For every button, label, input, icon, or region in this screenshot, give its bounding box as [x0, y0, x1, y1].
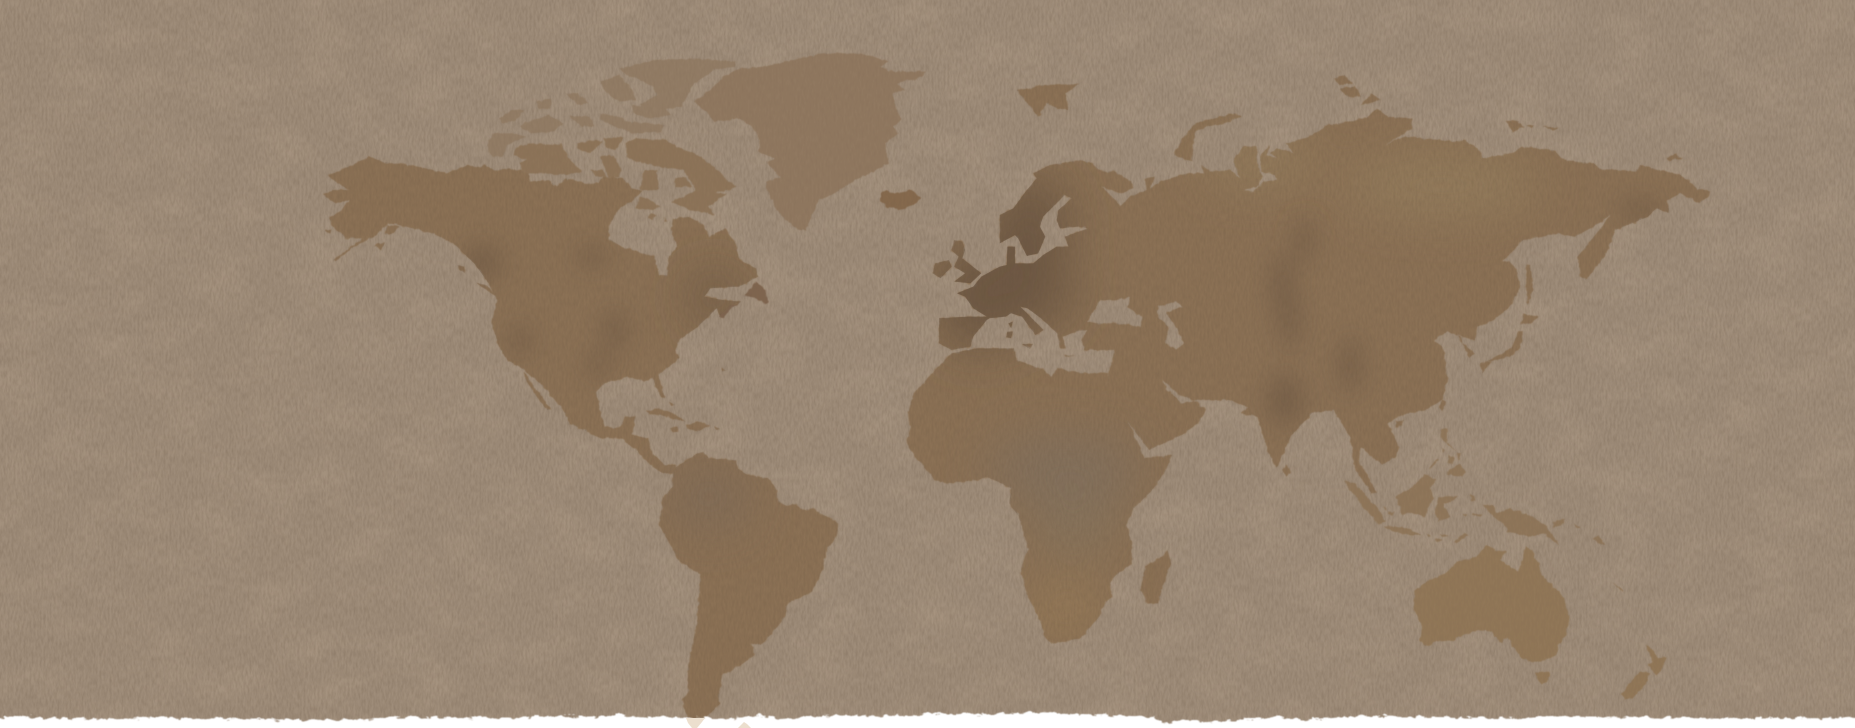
watercolor shading on land	[338, 78, 1682, 696]
world map	[323, 53, 1710, 718]
Southeast Asia islands	[1343, 428, 1623, 592]
continent: Australia and New Zealand	[1413, 545, 1667, 699]
continent: Eurasia	[933, 75, 1710, 493]
land masses	[323, 53, 1710, 718]
continent: South America	[659, 452, 838, 718]
faded South America tip on white edge	[686, 718, 751, 728]
Greenland and Iceland	[694, 53, 926, 230]
continent: Africa	[907, 348, 1172, 644]
continent: North America	[323, 157, 769, 473]
Arctic Canada islands	[487, 58, 737, 222]
torn white paper edge	[0, 712, 1855, 728]
